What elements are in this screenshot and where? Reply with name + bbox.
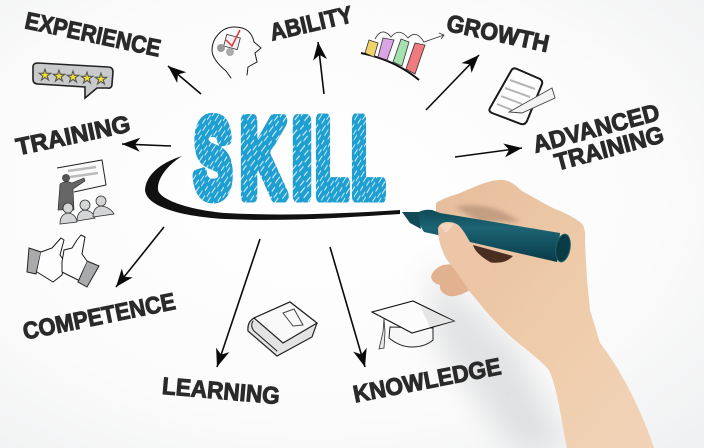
main word: SKILL: L [352, 98, 384, 220]
arrow: to experience [168, 66, 201, 94]
lower fingers [431, 262, 470, 296]
main word: SKILL: I [292, 96, 312, 220]
hand and forearm [436, 180, 654, 448]
arrow: to training [122, 144, 171, 146]
label: ABILITY: ABILITY [267, 1, 355, 47]
main word: SKILL: K [240, 96, 286, 219]
hand drawing with marker [402, 180, 654, 448]
label: TRAINING: TRAINING [14, 111, 133, 161]
label: ADVANCED TRAINING: ADVANCED [530, 99, 663, 159]
main word: SKILL [194, 96, 384, 220]
thumbnail highlight [440, 223, 454, 233]
icon: presenter at board with audience [57, 160, 114, 224]
arrow: to ability [318, 42, 324, 94]
arrow: to competence [116, 227, 164, 287]
icon: rating bubble: ★ [38, 67, 52, 84]
icon: rating bubble [33, 63, 113, 98]
icon: graduation cap [372, 301, 454, 349]
thumb over pen [438, 222, 500, 293]
icon: clipboard with pencil [489, 68, 555, 124]
marker underline swoosh [145, 156, 400, 220]
arrow: to advanced training [455, 148, 522, 157]
shadow behind pen [455, 205, 520, 222]
icon: rating bubble: ★ [94, 71, 108, 88]
icon: rating bubble: ★ [66, 69, 80, 86]
label: COMPETENCE: COMPETENCE [21, 288, 178, 346]
label: LEARNING: LEARNING [161, 373, 281, 410]
icon: rating bubble: ★ [80, 70, 94, 87]
icon: head with check and gears [212, 27, 261, 78]
arrow: to growth [426, 55, 479, 110]
icon: rating bubble: ★ [52, 68, 66, 85]
arrow: to learning [217, 239, 260, 367]
label: KNOWLEDGE: KNOWLEDGE [351, 353, 503, 409]
label: GROWTH: GROWTH [444, 10, 551, 58]
icon: book [248, 302, 317, 356]
icon: thumbs up hands [27, 235, 99, 287]
arrow: to knowledge [330, 247, 365, 367]
main word: SKILL: S [194, 96, 232, 220]
hand shadow [430, 265, 565, 448]
label: EXPERIENCE: EXPERIENCE [22, 7, 163, 63]
marker pen [402, 210, 572, 263]
main word: SKILL: L [316, 98, 348, 220]
label: ADVANCED TRAINING: TRAINING [552, 121, 667, 176]
icon: bar chart growth [361, 32, 444, 80]
